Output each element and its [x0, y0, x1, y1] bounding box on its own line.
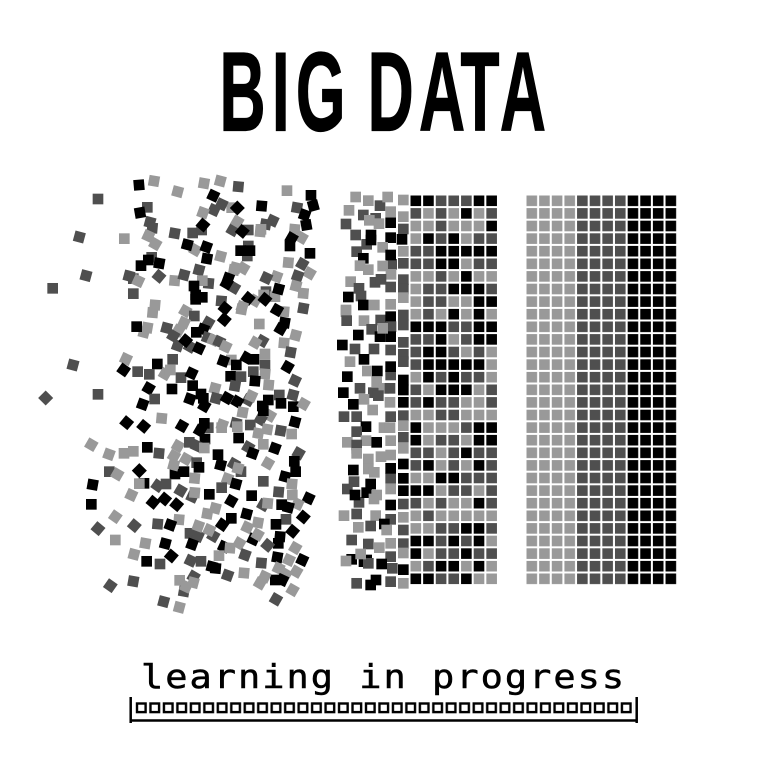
- caption: learning in progress: learning in progress: [141, 658, 626, 696]
- transition: bottom section: [339, 448, 409, 590]
- scattered data squares: [38, 174, 320, 614]
- progress bar: [131, 697, 637, 723]
- black band: [628, 196, 677, 584]
- dark grey band: [577, 196, 626, 584]
- ordered grid in three tone bands: [526, 196, 677, 584]
- title: BIGDATA: [219, 30, 546, 155]
- progress bar cells: [136, 702, 634, 714]
- mixed tone square grid: [410, 196, 497, 584]
- transition column of loosening squares: [337, 192, 409, 590]
- scatter: lower part: [38, 388, 316, 614]
- transition: middle section: [337, 306, 409, 454]
- light grey band: [526, 196, 576, 584]
- progress bar bracket: [131, 697, 637, 723]
- scatter: upper part: [47, 174, 320, 396]
- transition: top section: [341, 192, 409, 315]
